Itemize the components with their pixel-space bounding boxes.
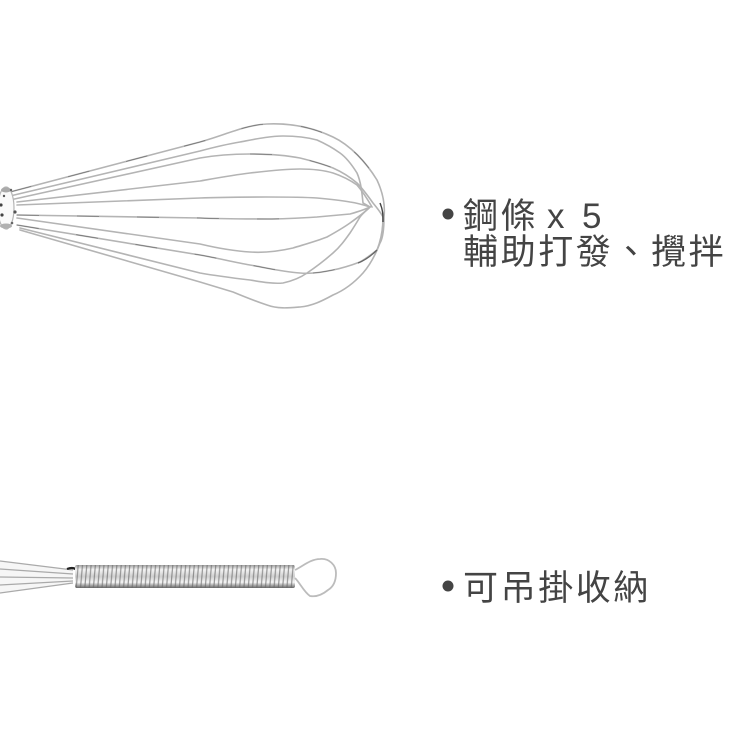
whisk head with five steel wires — [0, 124, 384, 308]
text: wire count: x — [547, 197, 567, 236]
bullet — [442, 580, 454, 592]
text: storage: 可吊掛收納 — [463, 569, 651, 608]
feature: hangable storage — [442, 569, 651, 608]
bullet — [442, 208, 454, 220]
text: wire count: 5 — [582, 197, 604, 236]
whisk handle — [0, 559, 336, 596]
coil spring grip — [75, 565, 295, 588]
feature: five steel wires — [442, 197, 726, 272]
wire loops — [10, 124, 384, 308]
text: wire count: 鋼條 — [463, 197, 538, 236]
text: wire use: 輔助打發、攪拌 — [463, 233, 726, 272]
wire ferrule — [0, 187, 17, 229]
wires entering handle — [0, 561, 80, 593]
hanging loop — [295, 559, 336, 596]
